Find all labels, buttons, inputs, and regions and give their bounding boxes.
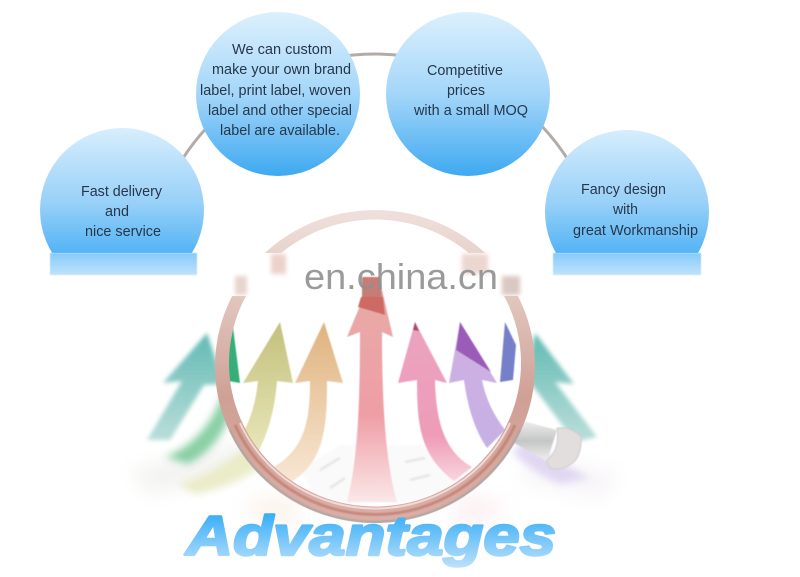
connector arc [183, 52, 568, 158]
chart paper in lens [319, 456, 431, 490]
text: custom label: We can custom [232, 42, 332, 58]
blurred arrows outside lens [147, 333, 597, 494]
soft background streaks [130, 440, 620, 530]
text: competitive prices: with a small MOQ [413, 103, 528, 119]
arrow: blurred violet right [512, 440, 590, 484]
title: Advantages: Advantages [184, 504, 556, 567]
text: custom label: label, print label, woven [200, 83, 351, 99]
panel: fast delivery circle [40, 128, 204, 276]
arrow: blurred teal left [147, 333, 224, 440]
arrow: green [229, 328, 241, 384]
arrow: blurred teal right [525, 333, 597, 442]
arrow: olive [240, 322, 293, 452]
text: custom label: make your own brand [212, 62, 351, 78]
arrow: purple [449, 322, 505, 448]
arrow: rose tip [413, 322, 419, 331]
text: competitive prices: Competitive [427, 63, 503, 79]
text: custom label: label and other special [208, 103, 352, 119]
arrow: purple tip [456, 322, 491, 372]
arrow: rose [398, 322, 472, 481]
magnifier ring [215, 210, 535, 523]
text: competitive prices: prices [447, 83, 485, 99]
lens interior [225, 217, 525, 513]
panel: custom label circle [196, 12, 360, 176]
arrow: central [347, 277, 397, 502]
arrow: blurred green left [165, 395, 234, 464]
arrows inside lens [222, 322, 516, 482]
text: custom label: label are available. [220, 123, 340, 139]
white mask below connector arc [150, 160, 600, 253]
text: fancy design: great Workmanship [573, 223, 698, 239]
panel: competitive prices circle [386, 12, 550, 176]
displaced ring fragments [235, 254, 520, 295]
text: fancy design: with [612, 202, 638, 218]
arrow tip: top [362, 277, 382, 297]
arrow: blue [500, 322, 516, 382]
text: fast delivery: nice service [85, 224, 161, 240]
text: fast delivery: Fast delivery [81, 184, 163, 200]
watermark: en.china.cn [304, 256, 498, 297]
text: fast delivery: and [105, 204, 129, 220]
arrow: blurred yellow left [178, 448, 265, 494]
magnifier handle [514, 421, 581, 469]
arrow: tan [272, 322, 343, 482]
panel: fancy design circle [545, 130, 709, 276]
arrow tip: central dark [358, 297, 385, 315]
white band hiding ring [200, 253, 545, 296]
text: fancy design: Fancy design [581, 182, 666, 198]
